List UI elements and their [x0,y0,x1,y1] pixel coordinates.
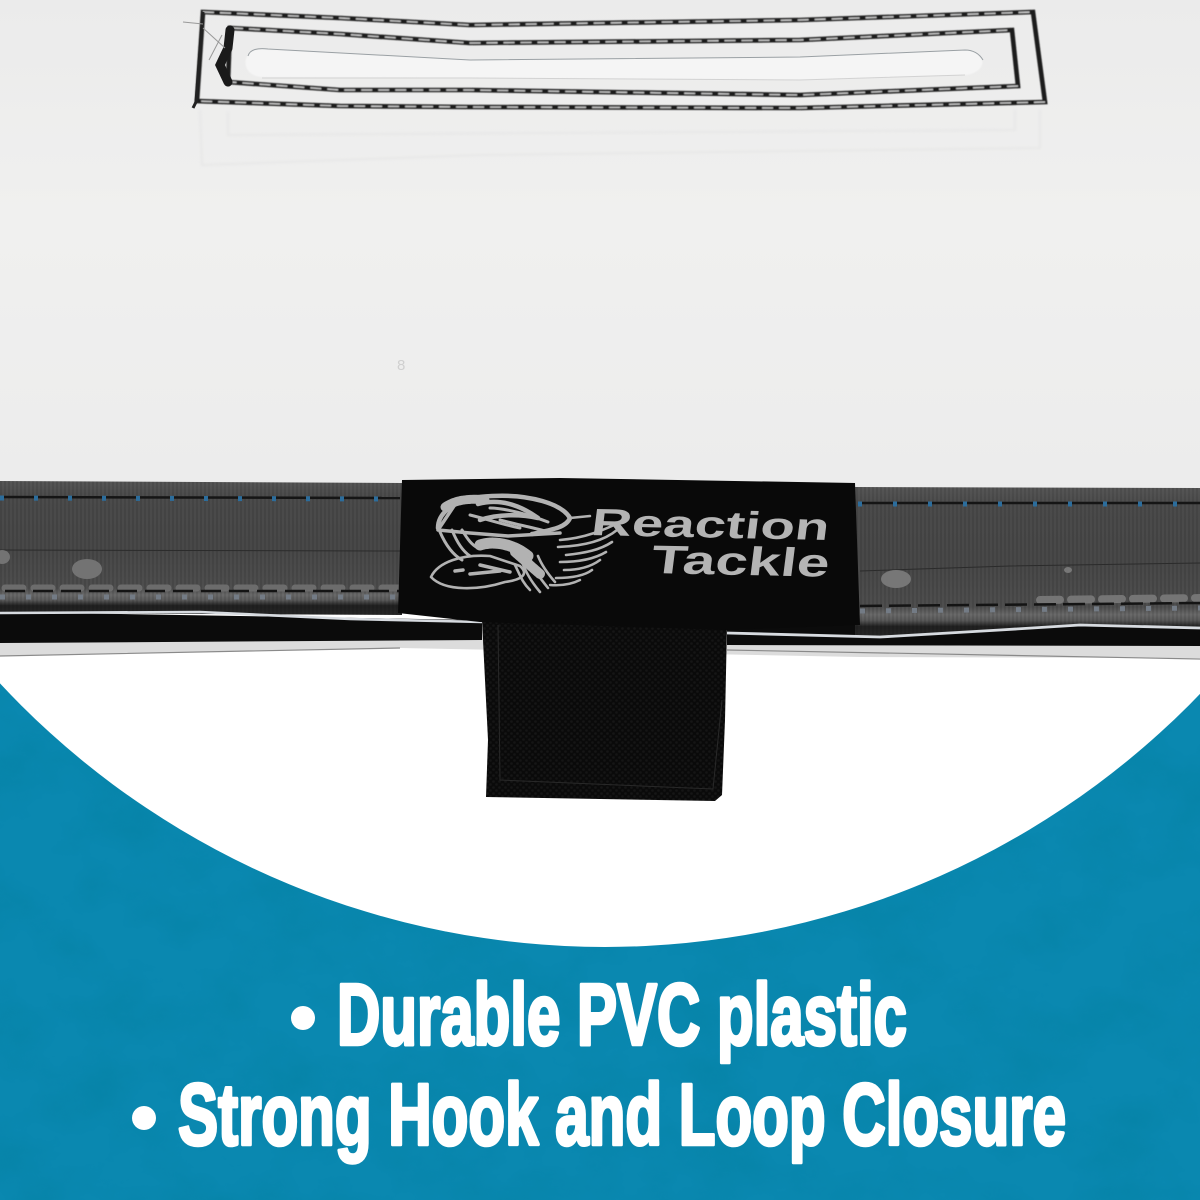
backstitch knot [220,30,230,82]
product photo: clear vinyl panel [0,0,1200,801]
black hem under band [0,612,482,643]
feature 1: durable PVC plastic [291,966,907,1064]
white circular cutout [0,0,1200,947]
brand name: Reaction: Reaction [589,502,832,549]
hook and loop tab [482,620,727,801]
skirt [515,556,555,592]
stitched slot pocket [183,12,1045,108]
lure outline [431,556,524,588]
slot opening [246,49,982,80]
band stitching right [727,503,1200,637]
inner stitching [228,28,1018,95]
small mark on vinyl: 8 [397,357,405,374]
vinyl sheet background [0,0,1200,490]
icon: bass and lure logo [431,496,624,592]
ghost shadow of stitching [200,110,1040,165]
band stitching left [0,497,482,622]
grey webbing band [0,481,402,615]
teal textured background [0,640,1200,1200]
feature list [132,966,1066,1164]
woven brand label [398,478,860,630]
bottom clear strip [0,628,1200,658]
speed lines [560,520,624,540]
outer stitching [197,12,1045,108]
feature 1: durable PVC plastic: Durable PVC plastic [337,966,907,1064]
brand name: Tackle: Tackle [649,538,832,586]
